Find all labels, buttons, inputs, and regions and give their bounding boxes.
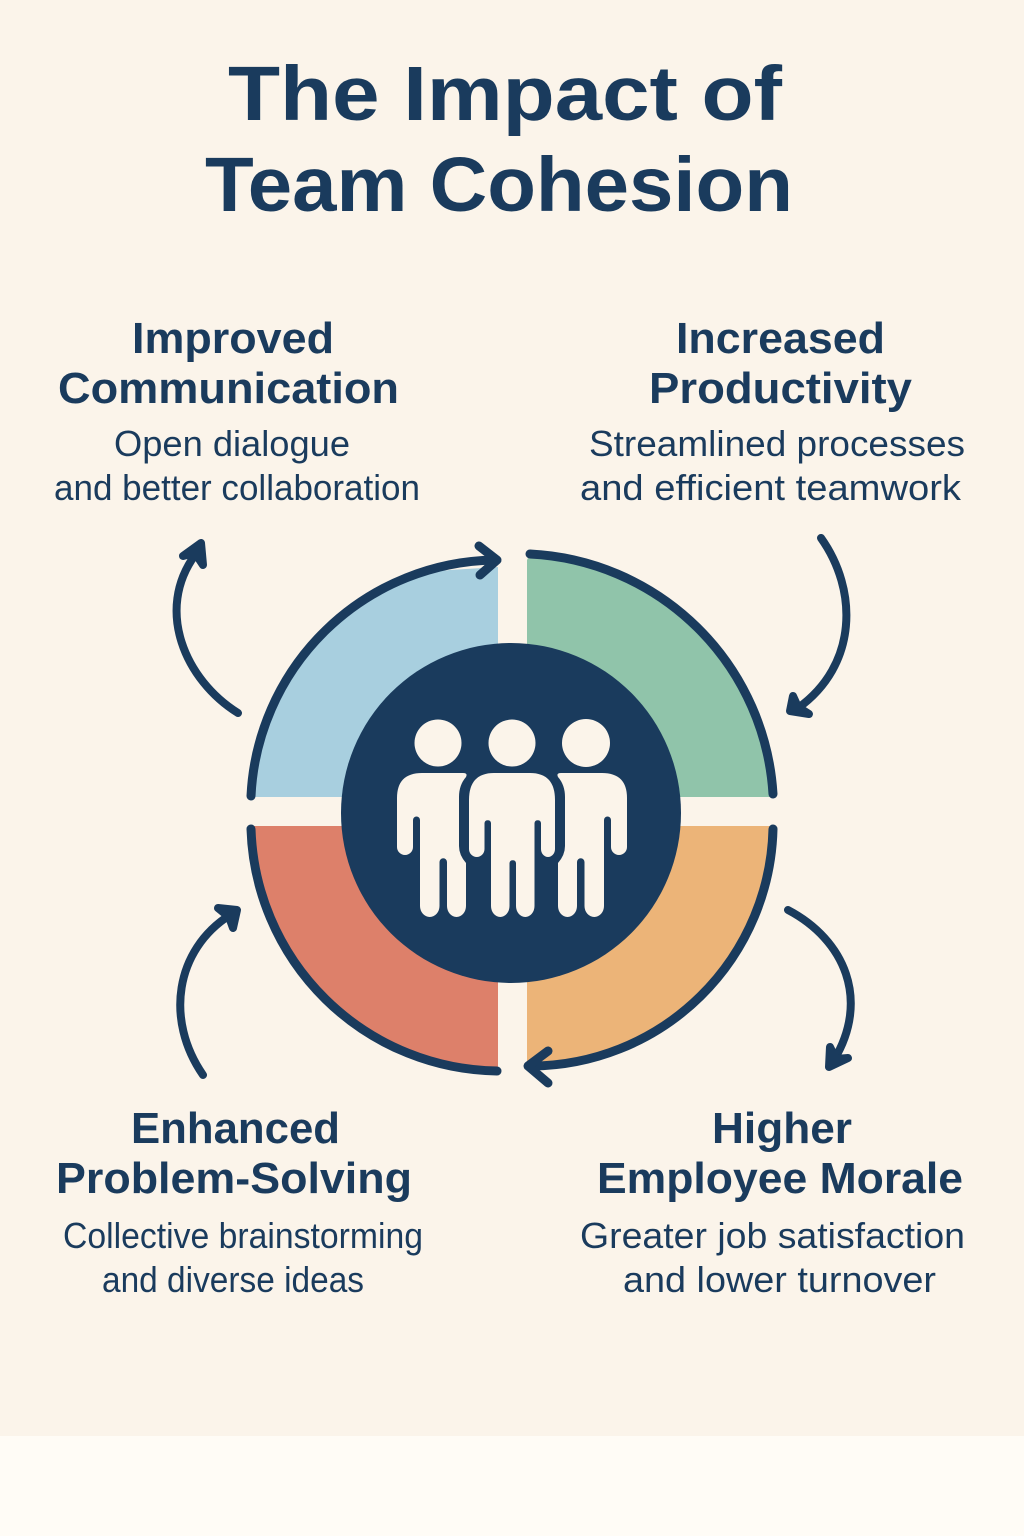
text block: Increased Productivity [580,314,965,508]
center circle [341,643,681,983]
segment: blue quadrant [251,567,498,797]
title: The Impact of [228,51,782,137]
text block: Improved Communication: and better collaboration [54,467,420,508]
text block: Increased Productivity: Streamlined processes [589,423,965,464]
text block: Higher Employee Morale: Higher [712,1104,852,1153]
text block: Enhanced Problem-Solving [56,1104,423,1300]
person: middle [469,720,555,917]
circular diagram [251,546,773,1083]
text block: Higher Employee Morale: Employee Morale [597,1154,963,1203]
text block: Enhanced Problem-Solving: Enhanced [131,1104,340,1153]
arrow: bottom right [788,910,851,1067]
arc: green quadrant outline [530,554,773,794]
text block: Increased Productivity: Productivity [649,364,913,413]
text block: Increased Productivity: Increased [676,314,885,363]
text block: Improved Communication [54,314,420,508]
segment: orange quadrant [527,826,773,1066]
text block: Improved Communication: Improved [132,314,334,363]
segment: green quadrant [527,554,773,797]
text block: Higher Employee Morale: Greater job satisfaction [580,1215,965,1256]
text block: Improved Communication: Open dialogue [114,423,350,464]
text block: Improved Communication: Communication [58,364,399,413]
text block: Enhanced Problem-Solving: Problem-Solving [56,1154,412,1203]
arc arrow: orange to red [528,829,773,1083]
segment: red quadrant [251,826,498,1071]
title [205,51,793,228]
arc: red quadrant outline [251,829,497,1071]
text block: Enhanced Problem-Solving: and diverse ideas [102,1259,364,1300]
text block: Increased Productivity: and efficient teamwork [580,467,962,508]
title: Team Cohesion [205,142,793,228]
arrow: bottom left [180,908,237,1075]
person: left [397,720,467,917]
arrow: top left [177,543,238,713]
arrow: top right [790,538,846,714]
text block: Higher Employee Morale [580,1104,965,1300]
text block: Higher Employee Morale: and lower turnover [623,1259,936,1300]
text block: Enhanced Problem-Solving: Collective brainstorming [63,1215,423,1256]
arc arrow: blue to green [251,546,497,796]
icon: team of three people [397,719,627,917]
person: right [557,719,627,917]
